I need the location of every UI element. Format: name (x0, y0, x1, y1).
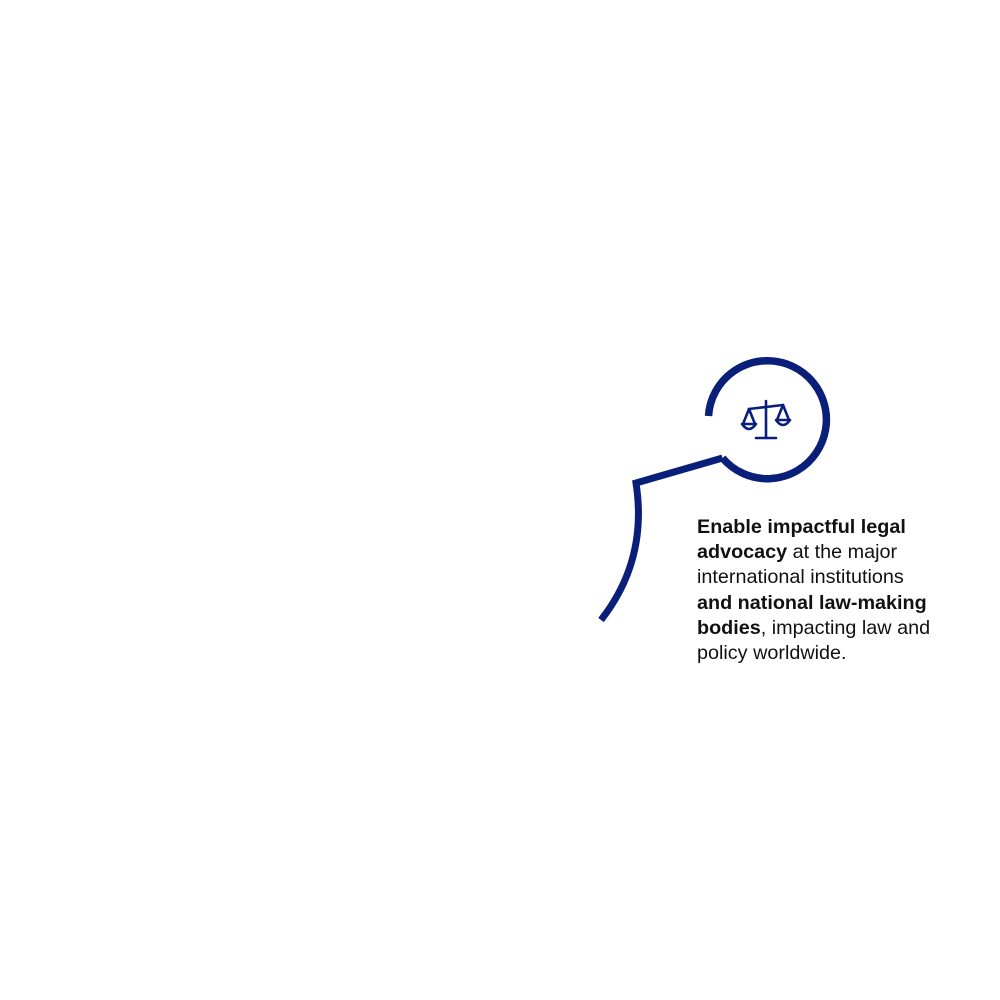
icon: scales (742, 401, 790, 438)
text block: and national law-making (697, 592, 927, 614)
text block (697, 516, 930, 664)
ring with gap (708, 361, 826, 479)
text block: international institutions (697, 566, 904, 588)
text block: bodies, impacting law and (697, 617, 930, 639)
text block: advocacy at the major (697, 541, 897, 563)
connector line (601, 458, 722, 620)
text block: policy worldwide. (697, 642, 847, 664)
text block: Enable impactful legal (697, 516, 906, 538)
